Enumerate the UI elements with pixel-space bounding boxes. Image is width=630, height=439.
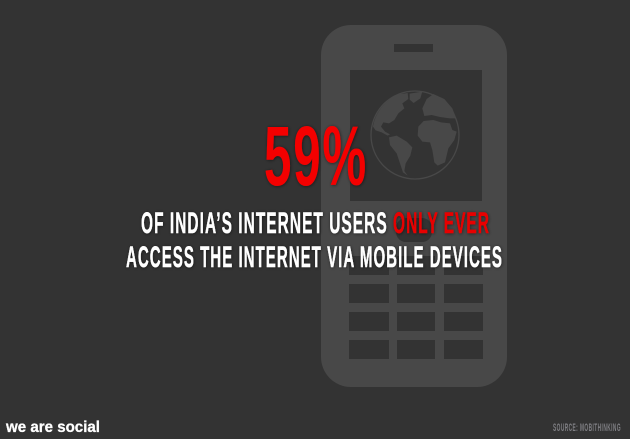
icon: globe <box>371 91 459 179</box>
statistic: 59%: 59% <box>264 109 368 203</box>
brand: we are social: we are social <box>5 419 100 436</box>
icon: mobile phone <box>321 25 507 387</box>
headline line 1: OF INDIA’S INTERNET USERS ONLY EVER <box>141 207 490 240</box>
